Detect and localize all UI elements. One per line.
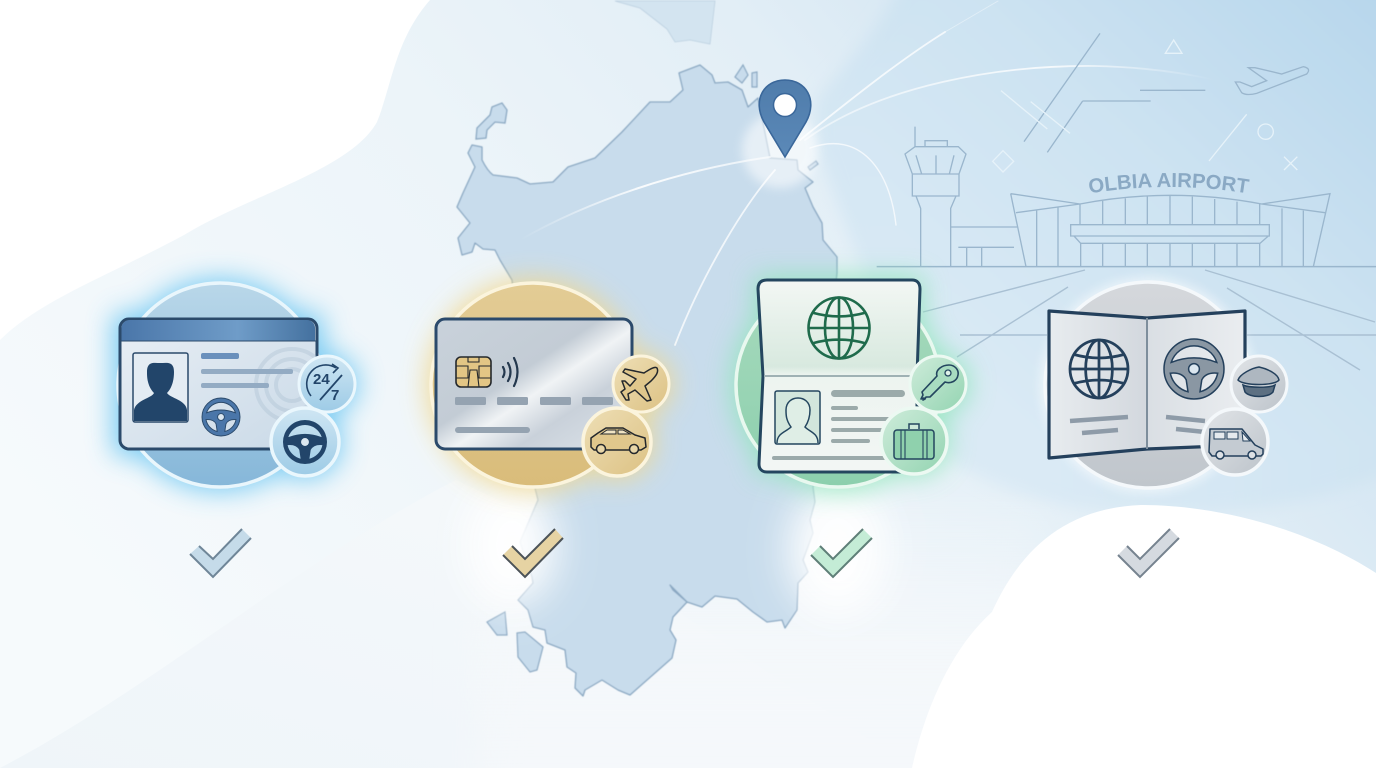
photo	[775, 391, 820, 444]
gold glow	[426, 278, 673, 492]
check mark: grey	[1118, 529, 1179, 577]
open booklet	[1049, 311, 1245, 458]
panel: driving licence	[112, 278, 359, 492]
card	[436, 319, 632, 449]
flight route lines	[520, 1, 1215, 345]
map: Asinara island	[476, 103, 507, 139]
badge: 24/7: 7	[331, 387, 339, 404]
badge: chauffeur cap	[1231, 356, 1287, 412]
globe	[1070, 340, 1128, 398]
map: Corsica tip	[615, 1, 715, 44]
text lines	[1070, 417, 1205, 433]
airport name: OLBIA AIRPORT	[1089, 173, 1250, 193]
text lines	[772, 390, 905, 460]
panel: credit card	[426, 278, 673, 492]
backing circle	[736, 283, 940, 487]
background: lower-left light band	[0, 480, 912, 768]
contactless mark	[503, 358, 518, 386]
airport line art	[876, 33, 1376, 268]
backing circle	[431, 283, 635, 487]
check mark: green	[811, 529, 872, 577]
badge: 24/7: 24	[313, 371, 330, 388]
green glow	[731, 276, 970, 492]
runway lines	[923, 270, 1376, 370]
panel: international driving permit	[1040, 277, 1287, 493]
badge: van	[1202, 409, 1268, 475]
number blocks	[455, 397, 613, 433]
globe emblem	[808, 298, 870, 358]
badge: plane	[613, 356, 669, 412]
passport	[758, 280, 920, 472]
badge: car	[583, 408, 651, 476]
photo	[133, 353, 188, 422]
badge: suitcase	[881, 408, 947, 474]
low terminal building	[951, 227, 1017, 267]
map: south-west islands	[487, 612, 543, 672]
airport name	[1089, 173, 1250, 193]
background: fade toward the lower centre	[480, 490, 1040, 768]
terminal	[1011, 194, 1330, 267]
ground line	[877, 264, 1376, 269]
glow at Olbia	[742, 112, 818, 188]
background: deeper blue upper-right wave	[835, 0, 1376, 494]
control tower	[905, 127, 966, 267]
text lines	[201, 353, 239, 359]
steering wheel	[1164, 339, 1224, 399]
check mark: gold	[503, 529, 563, 577]
location pin	[759, 80, 811, 157]
check mark: blue	[190, 529, 251, 577]
decorative lines	[1024, 33, 1205, 152]
map: Sardinia island	[457, 1, 837, 696]
panel: passport	[731, 276, 970, 492]
map: northern islands	[735, 65, 818, 170]
backing circle	[1045, 282, 1251, 488]
backing circle	[118, 283, 322, 487]
badge: steering wheel	[271, 408, 339, 476]
licence card	[120, 319, 328, 449]
badge: key	[910, 356, 966, 412]
badge: 24/7	[299, 356, 355, 412]
small wheel	[202, 398, 240, 436]
chip	[456, 357, 491, 387]
white glow	[1040, 277, 1256, 493]
blue glow	[112, 278, 359, 492]
airplane icon	[1235, 67, 1309, 95]
background: white lower-right wave	[912, 505, 1376, 768]
white glows behind checks	[467, 485, 888, 615]
